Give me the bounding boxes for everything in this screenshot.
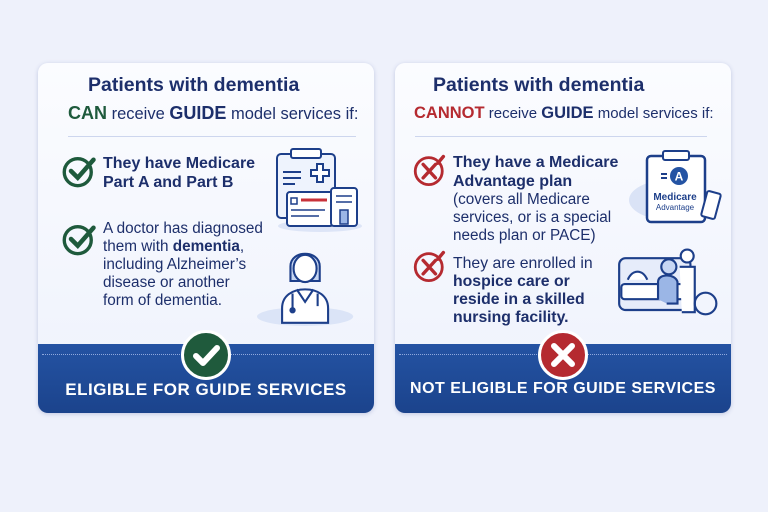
item 1: They have a Medicare bbox=[453, 154, 618, 171]
item 2 bbox=[103, 220, 263, 309]
item 1: They have Medicare bbox=[103, 155, 255, 172]
icon: big x bbox=[538, 330, 588, 380]
item 2: including Alzheimer’s bbox=[103, 256, 246, 273]
item 2: They are enrolled in bbox=[453, 255, 593, 272]
title: Patients with dementia bbox=[433, 74, 644, 96]
icon: medicare advantage card: Medicare bbox=[653, 192, 697, 203]
banner text: ELIGIBLE FOR GUIDE SERVICES bbox=[65, 380, 347, 399]
item 2: them with dementia, bbox=[103, 238, 244, 255]
panel: cannot receive bbox=[395, 63, 731, 413]
title: Patients with dementia bbox=[88, 74, 299, 96]
icon: medicare advantage card: A bbox=[675, 170, 684, 184]
icon: medicare advantage card bbox=[629, 150, 722, 224]
item 2: A doctor has diagnosed bbox=[103, 220, 263, 237]
icon: nursing care bbox=[618, 248, 718, 316]
item 1: services, or is a special bbox=[453, 209, 611, 226]
icon: medicare advantage card: Advantage bbox=[656, 203, 695, 212]
subtitle: CANNOT receive GUIDE model services if: bbox=[414, 104, 714, 122]
item 2: hospice care or bbox=[453, 273, 570, 290]
item 1 bbox=[103, 155, 255, 191]
icon: medical records bbox=[276, 148, 362, 232]
icon: big check bbox=[181, 330, 231, 380]
icon: x 2 bbox=[414, 250, 446, 282]
icon: doctor bbox=[257, 252, 353, 326]
item 1 bbox=[453, 154, 618, 244]
item 2: disease or another bbox=[103, 274, 230, 291]
item 2 bbox=[453, 255, 593, 326]
subtitle: CAN receive GUIDE model services if: bbox=[68, 103, 358, 123]
item 1: needs plan or PACE) bbox=[453, 227, 596, 244]
icon: check 1 bbox=[62, 157, 96, 188]
item 1: Advantage plan bbox=[453, 173, 572, 190]
banner: not eligible bbox=[395, 344, 731, 413]
item 1: Part A and Part B bbox=[103, 174, 233, 191]
icon: x 1 bbox=[414, 154, 446, 186]
item 1: (covers all Medicare bbox=[453, 191, 590, 208]
icon: check 2 bbox=[62, 225, 96, 256]
item 2: nursing facility. bbox=[453, 309, 569, 326]
item 2: form of dementia. bbox=[103, 292, 222, 309]
banner: eligible bbox=[38, 344, 374, 413]
banner text: NOT ELIGIBLE FOR GUIDE SERVICES bbox=[410, 380, 716, 397]
panel: can receive bbox=[38, 63, 374, 413]
item 2: reside in a skilled bbox=[453, 291, 585, 308]
